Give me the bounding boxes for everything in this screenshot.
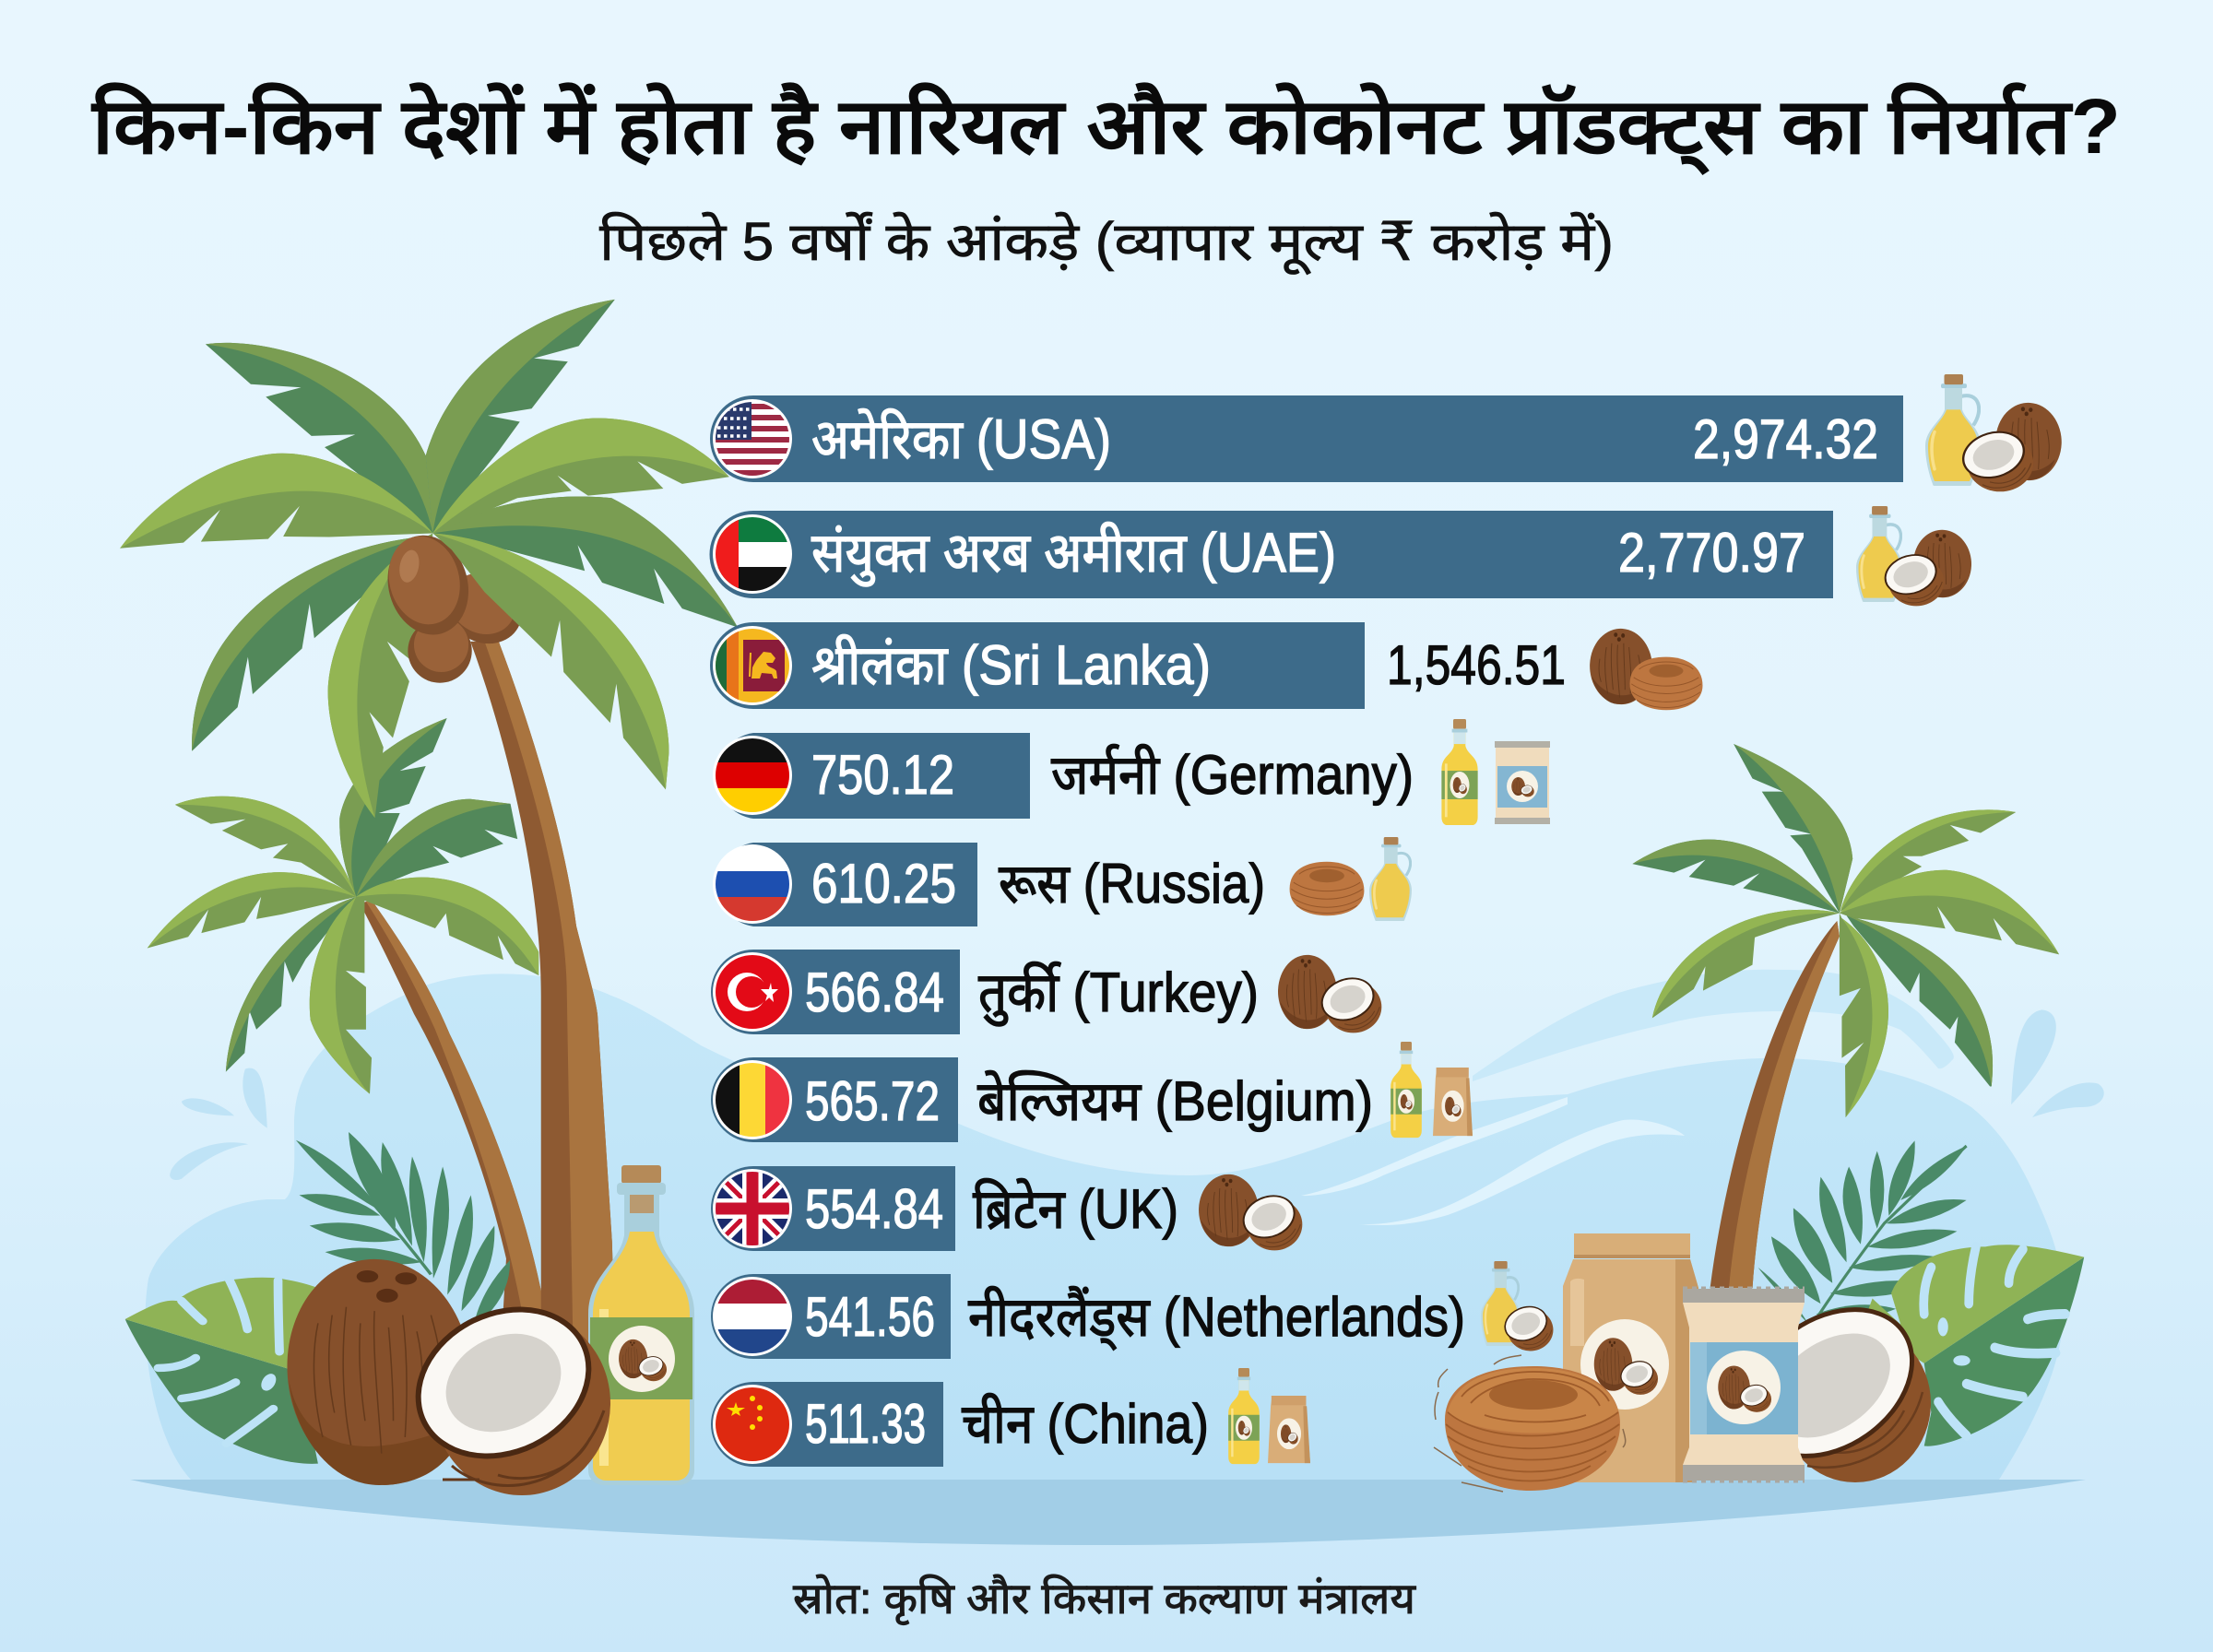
icon: oil and pouch (1441, 719, 1550, 825)
icon: coconut and coir (1586, 624, 1702, 710)
country name: नीदरलैंड्स (Netherlands) (968, 1286, 1465, 1351)
right palm tree (1632, 744, 2059, 1288)
value: 610.25 (811, 853, 956, 914)
subtitle: पिछले 5 वर्षों के आंकड़े (व्यापार मूल्य ₹ करोड़ में) (599, 212, 1614, 275)
icon: coconut (1274, 950, 1382, 1033)
ground shadow (130, 1480, 2086, 1545)
row: Sri Lanka (710, 622, 1702, 710)
value: 565.72 (805, 1070, 940, 1132)
flag: Netherlands (713, 1277, 792, 1356)
row: UAE (710, 506, 1975, 606)
value: 1,546.51 (1387, 634, 1566, 696)
value: 750.12 (811, 744, 954, 806)
flag: Russia (713, 844, 792, 924)
bar (710, 622, 1365, 709)
row: Russia (713, 837, 1412, 926)
bar (716, 733, 1030, 819)
row: Germany (713, 719, 1550, 825)
bar (711, 1057, 958, 1142)
bar (717, 843, 977, 926)
country name: ब्रिटेन (UK) (973, 1178, 1178, 1240)
flag: UK (713, 1169, 792, 1248)
big coconut whole (278, 1254, 479, 1491)
value: 566.84 (805, 962, 944, 1023)
background hill (146, 974, 2065, 1480)
fern right (1758, 1140, 1967, 1345)
big oil bottle (588, 1165, 694, 1485)
country name: संयुक्त अरब अमीरात (UAE) (811, 522, 1336, 587)
country name: श्रीलंका (Sri Lanka) (811, 634, 1211, 696)
big coconut half (390, 1278, 617, 1495)
icon: oil and bag (1391, 1042, 1473, 1138)
big snack pouch (1683, 1288, 1805, 1481)
value: 2,770.97 (1618, 522, 1805, 584)
light upper wave (1473, 970, 1954, 1081)
fern left (296, 1132, 510, 1328)
icon: coconut (1195, 1170, 1303, 1251)
main palm tree (120, 300, 738, 1397)
big coir nest (1434, 1355, 1626, 1492)
country name: जर्मनी (Germany) (1051, 744, 1414, 806)
icon: oil and coconut (1856, 506, 1975, 606)
water droplets left (170, 1068, 267, 1180)
bar (711, 1382, 943, 1467)
flag: China (713, 1385, 792, 1464)
country name: तुर्की (Turkey) (978, 962, 1259, 1027)
small palm tree left (148, 718, 553, 1339)
icon: oil and coconut (1481, 1261, 1554, 1351)
big coconut half right (1718, 1276, 1943, 1490)
flag: Germany (713, 736, 792, 815)
value: 541.56 (805, 1286, 935, 1348)
value: 2,974.32 (1693, 408, 1878, 470)
value: 554.84 (805, 1178, 943, 1240)
flag: USA (713, 399, 792, 478)
big paper bag (1563, 1233, 1698, 1482)
bar (711, 1274, 951, 1359)
source: स्रोत: कृषि और किसान कल्याण मंत्रालय (793, 1574, 1416, 1625)
bar (711, 1166, 955, 1251)
country name: बेल्जियम (Belgium) (977, 1070, 1373, 1132)
flag: Turkey (713, 952, 792, 1032)
row: Belgium (711, 1042, 1473, 1142)
icon: oil and bag (1228, 1368, 1310, 1464)
icon: oil and coconut (1925, 374, 2066, 491)
country name: अमेरिका (USA) (811, 408, 1111, 470)
bar (711, 950, 960, 1034)
icon: coir and oil (1290, 837, 1412, 921)
monstera leaf right (1863, 1245, 2084, 1446)
row: Turkey (711, 950, 1382, 1034)
bar (710, 395, 1903, 482)
white wave two (1358, 1120, 1685, 1225)
row: UK (711, 1166, 1303, 1251)
value: 511.33 (805, 1393, 926, 1455)
monstera leaf left (125, 1278, 332, 1464)
country name: रूस (Russia) (999, 853, 1265, 914)
row: Netherlands (711, 1261, 1554, 1359)
water droplets right (2011, 1009, 2104, 1117)
flag: Sri Lanka (713, 626, 792, 705)
row: China (711, 1368, 1310, 1467)
white wave one (1301, 1097, 1568, 1196)
title: किन-किन देशों में होता है नारियल और कोकोनट प्रॉडक्ट्स का निर्यात? (90, 82, 2121, 175)
flag: UAE (713, 514, 792, 594)
bar (710, 511, 1833, 598)
country name: चीन (China) (962, 1393, 1209, 1455)
flag: Belgium (713, 1060, 792, 1139)
row: USA (710, 374, 2066, 491)
